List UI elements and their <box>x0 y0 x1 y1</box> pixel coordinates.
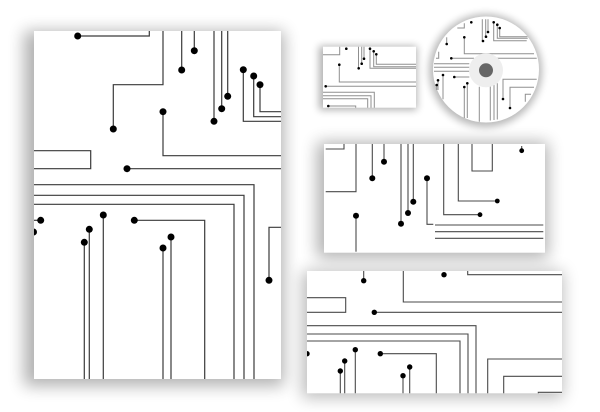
circuit traces: letterhead <box>34 31 281 379</box>
panel: large letterhead sheet <box>24 31 284 386</box>
circuit nodes: disc <box>435 21 511 109</box>
disc hub <box>469 53 503 87</box>
panel: compact disc <box>429 14 542 127</box>
panel: wide sheet <box>302 271 563 398</box>
circuit nodes: letterhead <box>30 32 272 284</box>
circuit traces: disc <box>434 19 537 122</box>
circuit nodes: wide sheet <box>304 272 447 378</box>
circuit nodes: envelope <box>353 148 524 227</box>
circuit traces: business card <box>323 47 416 108</box>
panel: envelope <box>317 142 548 258</box>
circuit nodes: business card <box>324 47 378 107</box>
circuit traces: envelope <box>326 144 543 252</box>
circuit traces: wide sheet <box>307 271 562 393</box>
panel: business card <box>319 46 417 110</box>
